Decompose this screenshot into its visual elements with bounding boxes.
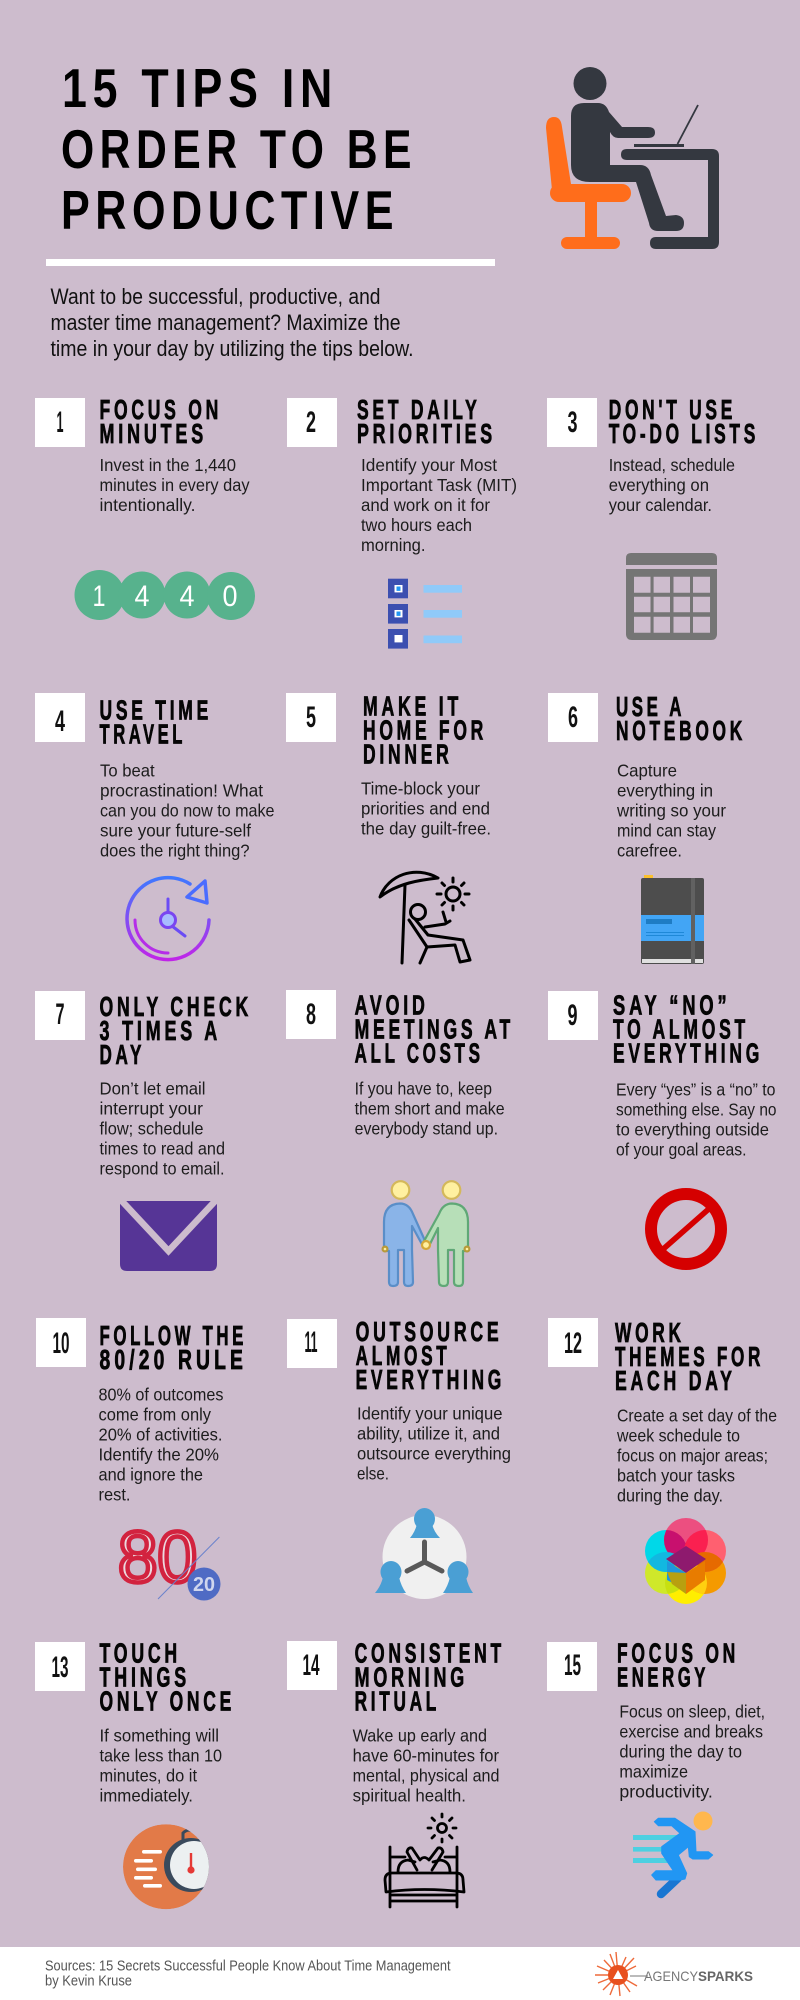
body tip 4: does the right thing? bbox=[100, 841, 250, 861]
body tip 9: something else. Say no bbox=[616, 1099, 776, 1119]
number box 10 bbox=[36, 1318, 86, 1367]
body tip 12 bbox=[616, 1406, 777, 1506]
body tip 10: come from only bbox=[98, 1405, 211, 1425]
body tip 12: Create a set day of the bbox=[617, 1406, 777, 1426]
body tip 7 bbox=[100, 1078, 225, 1178]
panel: tip 14 bbox=[287, 1638, 505, 1907]
body tip 6: writing so your bbox=[616, 801, 726, 821]
body tip 10: 20% of activities. bbox=[98, 1425, 222, 1445]
heading tip 1 bbox=[100, 394, 222, 449]
body tip 3: Instead, schedule bbox=[609, 455, 735, 475]
body tip 4: procrastination! What bbox=[100, 781, 263, 801]
heading tip 11: ALMOST bbox=[356, 1340, 450, 1371]
heading tip 7: ONLY CHECK bbox=[100, 991, 252, 1022]
heading tip 13 bbox=[100, 1638, 235, 1717]
body tip 7: Don’t let email bbox=[100, 1078, 206, 1098]
icon: person at desk bbox=[546, 67, 719, 249]
body tip 7: respond to email. bbox=[100, 1158, 224, 1178]
icon: 1440 circles: 4 bbox=[180, 580, 194, 613]
sources text bbox=[45, 1959, 450, 1990]
body tip 10: 80% of outcomes bbox=[98, 1385, 224, 1405]
sources text: by Kevin Kruse bbox=[45, 1974, 132, 1990]
heading tip 6 bbox=[616, 691, 746, 746]
number box 15 bbox=[547, 1642, 597, 1691]
icon: 1440 circles bbox=[74, 570, 255, 620]
icon: relaxing under umbrella bbox=[380, 872, 470, 963]
body tip 6: Capture bbox=[617, 761, 677, 781]
heading tip 15: ENERGY bbox=[617, 1662, 709, 1693]
body tip 2 bbox=[361, 455, 517, 555]
icon: waking up in bed bbox=[385, 1814, 464, 1907]
panel: tip 3 bbox=[547, 394, 759, 640]
heading tip 12 bbox=[615, 1317, 764, 1396]
logo: Agency Sparks: AGENCY bbox=[644, 1968, 699, 1984]
number box 8 bbox=[286, 990, 336, 1039]
sources text: Sources: 15 Secrets Successful People Know About Time Management bbox=[45, 1959, 450, 1975]
number box 11 bbox=[287, 1319, 337, 1368]
body tip 3 bbox=[609, 455, 735, 515]
panel: tip 10 bbox=[36, 1318, 247, 1600]
body tip 13: immediately. bbox=[100, 1785, 193, 1805]
intro text bbox=[50, 284, 414, 361]
panel: tip 8 bbox=[286, 989, 514, 1286]
body tip 5: Time-block your bbox=[361, 778, 480, 798]
number box 9 bbox=[548, 991, 598, 1040]
body tip 12: week schedule to bbox=[616, 1426, 740, 1446]
heading tip 11: OUTSOURCE bbox=[356, 1316, 502, 1347]
number box 6: 6 bbox=[568, 701, 578, 734]
panel: tip 4 bbox=[35, 693, 274, 960]
number box 14 bbox=[287, 1641, 337, 1690]
number box 1 bbox=[35, 398, 85, 447]
heading tip 2: SET DAILY bbox=[357, 394, 480, 425]
body tip 14: mental, physical and bbox=[353, 1765, 500, 1785]
intro text: master time management? Maximize the bbox=[50, 310, 400, 335]
body tip 2: Important Task (MIT) bbox=[361, 475, 517, 495]
body tip 9: to everything outside bbox=[616, 1119, 769, 1139]
heading tip 7 bbox=[100, 991, 252, 1070]
body tip 11: Identify your unique bbox=[357, 1404, 502, 1424]
number box 10: 10 bbox=[52, 1327, 70, 1360]
number box 7 bbox=[35, 991, 85, 1040]
heading tip 2: PRIORITIES bbox=[357, 418, 496, 449]
heading tip 10 bbox=[100, 1320, 247, 1375]
body tip 14 bbox=[353, 1725, 500, 1805]
body tip 11: else. bbox=[357, 1464, 389, 1484]
heading tip 4 bbox=[100, 694, 212, 749]
heading tip 4: USE TIME bbox=[100, 694, 212, 725]
body tip 4: can you do now to make bbox=[100, 801, 274, 821]
number box 12: 12 bbox=[564, 1327, 582, 1360]
icon: envelope bbox=[119, 1198, 218, 1271]
logo: Agency Sparks bbox=[595, 1952, 753, 1996]
title: 15 TIPS IN bbox=[62, 58, 338, 119]
heading tip 13: ONLY ONCE bbox=[100, 1686, 235, 1717]
icon: checklist bbox=[388, 579, 462, 649]
body tip 1 bbox=[100, 455, 250, 515]
body tip 8 bbox=[355, 1078, 505, 1138]
heading tip 11 bbox=[356, 1316, 505, 1395]
icon: two people shaking hands bbox=[383, 1181, 469, 1286]
number box 8: 8 bbox=[306, 998, 316, 1031]
body tip 6: everything in bbox=[617, 781, 713, 801]
body tip 15: exercise and breaks bbox=[619, 1721, 763, 1741]
body tip 1: intentionally. bbox=[100, 495, 196, 515]
body tip 4: To beat bbox=[100, 761, 155, 781]
body tip 15 bbox=[619, 1701, 765, 1801]
body tip 3: your calendar. bbox=[609, 495, 712, 515]
body tip 15: during the day to bbox=[619, 1741, 742, 1761]
body tip 13 bbox=[100, 1725, 222, 1805]
number box 14: 14 bbox=[302, 1649, 320, 1682]
panel: tip 6 bbox=[548, 691, 746, 964]
body tip 9 bbox=[616, 1079, 776, 1159]
body tip 8: them short and make bbox=[355, 1098, 505, 1118]
icon: calendar bbox=[626, 553, 717, 640]
body tip 11: outsource everything bbox=[357, 1444, 511, 1464]
icon: clock with arrow bbox=[127, 878, 209, 960]
icon: 80/20: 80 bbox=[118, 1518, 197, 1598]
heading tip 14 bbox=[355, 1638, 505, 1717]
body tip 13: minutes, do it bbox=[100, 1765, 197, 1785]
panel: tip 1 bbox=[35, 394, 255, 620]
heading tip 14: MORNING bbox=[355, 1662, 468, 1693]
body tip 3: everything on bbox=[609, 475, 709, 495]
panel: tip 11 bbox=[287, 1316, 511, 1599]
number box 11: 11 bbox=[304, 1326, 318, 1359]
panel: tip 15 bbox=[547, 1638, 765, 1894]
body tip 13: take less than 10 bbox=[100, 1745, 222, 1765]
number box 5 bbox=[286, 693, 336, 742]
heading tip 7: 3 TIMES A bbox=[100, 1015, 221, 1046]
number box 13: 13 bbox=[52, 1651, 68, 1684]
heading tip 14: CONSISTENT bbox=[355, 1638, 505, 1669]
heading tip 1: MINUTES bbox=[100, 418, 207, 449]
number box 15: 15 bbox=[564, 1649, 581, 1682]
title: ORDER TO BE bbox=[61, 119, 417, 180]
body tip 14: Wake up early and bbox=[353, 1725, 487, 1745]
heading tip 10: FOLLOW THE bbox=[100, 1320, 247, 1351]
body tip 6 bbox=[616, 761, 726, 861]
intro text: Want to be successful, productive, and bbox=[50, 284, 380, 309]
body tip 13: If something will bbox=[100, 1725, 219, 1745]
number box 2: 2 bbox=[306, 406, 316, 439]
body tip 9: of your goal areas. bbox=[616, 1139, 746, 1159]
number box 9: 9 bbox=[568, 999, 578, 1032]
number box 1: 1 bbox=[56, 406, 64, 439]
number box 3 bbox=[547, 398, 597, 447]
body tip 5 bbox=[361, 778, 491, 838]
number box 7: 7 bbox=[56, 998, 64, 1031]
body tip 10: and ignore the bbox=[98, 1465, 203, 1485]
icon: prohibited sign bbox=[651, 1194, 721, 1264]
heading tip 10: 80/20 RULE bbox=[100, 1344, 247, 1375]
body tip 12: focus on major areas; bbox=[617, 1446, 768, 1466]
body tip 15: productivity. bbox=[619, 1781, 713, 1801]
body tip 7: interrupt your bbox=[100, 1098, 203, 1118]
heading tip 7: DAY bbox=[100, 1039, 145, 1070]
body tip 9: Every “yes” is a “no” to bbox=[616, 1079, 776, 1099]
icon: runner bbox=[633, 1812, 713, 1894]
heading tip 8: ALL COSTS bbox=[355, 1037, 484, 1068]
title: PRODUCTIVE bbox=[61, 180, 399, 241]
heading tip 13: TOUCH bbox=[100, 1638, 181, 1669]
intro text: time in your day by utilizing the tips below. bbox=[50, 336, 414, 361]
heading tip 11: EVERYTHING bbox=[356, 1364, 505, 1395]
number box 12 bbox=[548, 1318, 598, 1367]
icon: stopwatch bbox=[123, 1824, 218, 1909]
body tip 8: everybody stand up. bbox=[355, 1118, 498, 1138]
number box 2 bbox=[287, 398, 337, 447]
body tip 2: morning. bbox=[361, 535, 426, 555]
icon: overlapping colour circles bbox=[645, 1518, 726, 1604]
number box 13 bbox=[35, 1642, 85, 1691]
body tip 12: during the day. bbox=[617, 1486, 723, 1506]
heading tip 9 bbox=[613, 989, 763, 1068]
icon: 80/20: 20 bbox=[193, 1574, 215, 1596]
panel: tip 5 bbox=[286, 690, 491, 963]
title bbox=[61, 58, 417, 241]
body tip 10: rest. bbox=[98, 1485, 130, 1505]
body tip 15: Focus on sleep, diet, bbox=[619, 1701, 765, 1721]
heading tip 5: MAKE IT bbox=[363, 690, 462, 721]
body tip 2: Identify your Most bbox=[361, 455, 497, 475]
heading tip 5: DINNER bbox=[363, 738, 452, 769]
body tip 7: flow; schedule bbox=[100, 1118, 204, 1138]
body tip 1: Invest in the 1,440 bbox=[100, 455, 236, 475]
panel: tip 12 bbox=[548, 1317, 777, 1604]
logo: Agency Sparks: SPARKS bbox=[698, 1968, 753, 1984]
body tip 2: two hours each bbox=[361, 515, 472, 535]
heading tip 15 bbox=[617, 1638, 739, 1693]
heading tip 3 bbox=[609, 394, 759, 449]
body tip 10 bbox=[98, 1385, 224, 1505]
icon: 1440 circles: 1 bbox=[92, 580, 106, 613]
icon: 1440 circles: 4 bbox=[134, 580, 150, 613]
heading tip 2 bbox=[357, 394, 496, 449]
number box 4: 4 bbox=[55, 705, 65, 738]
number box 3: 3 bbox=[568, 406, 578, 439]
icon: 1440 circles: 0 bbox=[222, 580, 238, 613]
body tip 4: sure your future-self bbox=[100, 821, 251, 841]
icon: notebook bbox=[641, 875, 704, 964]
body tip 5: priorities and end bbox=[361, 798, 490, 818]
icon: outsourcing network bbox=[375, 1508, 473, 1599]
heading tip 5: HOME FOR bbox=[363, 714, 487, 745]
heading tip 5 bbox=[363, 690, 487, 769]
body tip 8: If you have to, keep bbox=[355, 1078, 492, 1098]
panel: tip 13 bbox=[35, 1638, 235, 1909]
body tip 4 bbox=[100, 761, 274, 861]
footer bbox=[0, 1947, 800, 2000]
heading tip 8: MEETINGS AT bbox=[355, 1013, 514, 1044]
heading tip 14: RITUAL bbox=[355, 1686, 440, 1717]
body tip 10: Identify the 20% bbox=[98, 1445, 219, 1465]
body tip 7: times to read and bbox=[100, 1138, 225, 1158]
heading tip 9: SAY “NO” bbox=[613, 989, 731, 1020]
heading tip 1: FOCUS ON bbox=[100, 394, 222, 425]
panel: tip 9 bbox=[548, 989, 776, 1264]
body tip 11 bbox=[357, 1404, 511, 1484]
body tip 15: maximize bbox=[619, 1761, 688, 1781]
body tip 14: have 60-minutes for bbox=[353, 1745, 499, 1765]
body tip 6: mind can stay bbox=[617, 821, 716, 841]
number box 6 bbox=[548, 693, 598, 742]
panel: tip 2 bbox=[287, 394, 517, 649]
body tip 5: the day guilt-free. bbox=[361, 818, 491, 838]
number box 5: 5 bbox=[306, 701, 316, 734]
heading tip 13: THINGS bbox=[100, 1662, 190, 1693]
heading tip 12: WORK bbox=[615, 1317, 685, 1348]
panel: tip 7 bbox=[35, 991, 252, 1271]
body tip 6: carefree. bbox=[617, 841, 682, 861]
heading tip 8: AVOID bbox=[355, 989, 429, 1020]
number box 4 bbox=[35, 693, 85, 742]
body tip 14: spiritual health. bbox=[353, 1785, 466, 1805]
body tip 11: ability, utilize it, and bbox=[357, 1424, 500, 1444]
heading tip 6: USE A bbox=[616, 691, 685, 722]
heading tip 4: TRAVEL bbox=[100, 718, 186, 749]
body tip 2: and work on it for bbox=[361, 495, 490, 515]
heading tip 8 bbox=[355, 989, 514, 1068]
body tip 1: minutes in every day bbox=[100, 475, 250, 495]
body tip 12: batch your tasks bbox=[617, 1466, 735, 1486]
